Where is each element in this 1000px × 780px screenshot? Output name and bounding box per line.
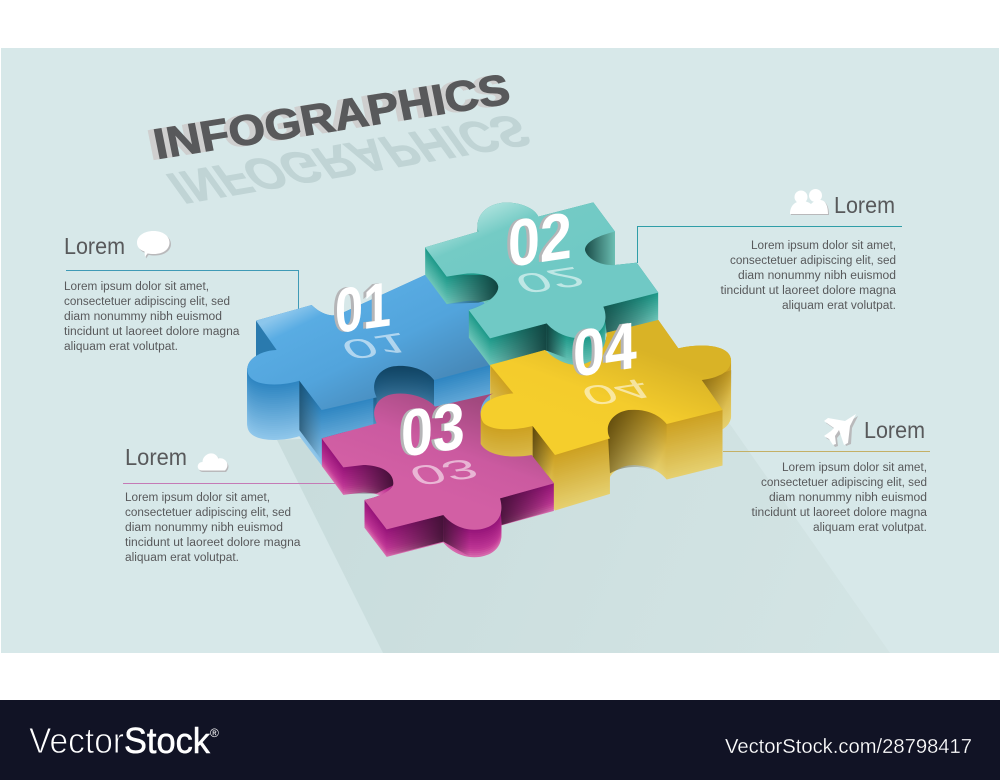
callout 04: bottom right (752, 414, 928, 534)
heading: Lorem (834, 192, 895, 218)
icon: people (790, 189, 829, 215)
footer logo: ® (210, 726, 219, 740)
piece 02: teal (425, 202, 658, 366)
footer logo: Vector (29, 720, 124, 761)
number reflections on pieces (334, 261, 658, 491)
body text: tincidunt ut laoreet dolore magna (125, 537, 301, 549)
title reflection: INFOGRAPHICS (156, 105, 542, 212)
body text: tincidunt ut laoreet dolore magna (720, 285, 897, 297)
number 04: 04 (570, 309, 634, 392)
body text: Lorem ipsum dolor sit amet, (751, 240, 896, 252)
number 02: 02 (505, 199, 569, 282)
body text: diam nonummy nibh euismod (64, 311, 222, 323)
title face: INFOGRAPHICS (150, 66, 514, 169)
number 02: 02 (508, 199, 572, 282)
footer logo: Stock (124, 720, 211, 761)
icon: speech bubble (137, 231, 171, 258)
body text: aliquam erat volutpat. (813, 522, 927, 534)
body text: tincidunt ut laoreet dolore magna (752, 507, 928, 519)
heading: Lorem (864, 417, 925, 443)
magenta side walls (322, 432, 554, 558)
callout 03: bottom left (125, 444, 301, 564)
body text: diam nonummy nibh euismod (738, 270, 896, 282)
reflection 02: 02 (508, 261, 592, 299)
number 03: 03 (398, 389, 462, 472)
number 01: 01 (335, 269, 391, 347)
footer bar (0, 700, 1000, 780)
reflection 03: 03 (402, 453, 486, 491)
heading: Lorem (125, 444, 187, 470)
footer logo (29, 720, 219, 761)
title extrusion: INFOGRAPHICS (148, 66, 512, 169)
body text (125, 492, 301, 564)
reflection 01: 01 (334, 327, 418, 365)
number 04: 04 (573, 309, 637, 392)
body text: consectetuer adipiscing elit, sed (125, 507, 291, 519)
puzzle pieces (247, 202, 732, 557)
heading: Lorem (64, 233, 125, 259)
body text (64, 281, 240, 353)
long cast shadow of puzzle (277, 420, 890, 653)
piece 01: blue (247, 275, 490, 465)
body text: consectetuer adipiscing elit, sed (730, 255, 896, 267)
title: INFOGRAPHICS (144, 66, 542, 212)
body text: consectetuer adipiscing elit, sed (64, 296, 230, 308)
body text: Lorem ipsum dolor sit amet, (125, 492, 270, 504)
body text: diam nonummy nibh euismod (125, 522, 283, 534)
title extrusion: INFOGRAPHICS (146, 66, 510, 169)
title extrusion: INFOGRAPHICS (144, 67, 508, 170)
icon: airplane (824, 414, 858, 447)
footer image id: VectorStock.com/28798417 (725, 736, 972, 758)
body text (720, 240, 897, 312)
piece 04: yellow side walls (481, 320, 732, 510)
body text: aliquam erat volutpat. (125, 552, 239, 564)
body text: aliquam erat volutpat. (782, 300, 896, 312)
callout connector lines (66, 226, 930, 484)
callout 02: top right (720, 189, 897, 312)
body text: aliquam erat volutpat. (64, 341, 178, 353)
background panel (1, 48, 999, 653)
body text: diam nonummy nibh euismod (769, 492, 927, 504)
piece 03: magenta (322, 393, 554, 557)
body text: tincidunt ut laoreet dolore magna (64, 326, 240, 338)
number 01: 01 (332, 269, 388, 347)
body text: consectetuer adipiscing elit, sed (761, 477, 927, 489)
body text (752, 462, 928, 534)
piece 04: yellow top face (481, 320, 731, 455)
magenta top face (322, 393, 554, 530)
icon: cloud (198, 453, 228, 472)
callout 01: left (64, 231, 240, 353)
number 03: 03 (401, 389, 465, 472)
body text: Lorem ipsum dolor sit amet, (64, 281, 209, 293)
body text: Lorem ipsum dolor sit amet, (782, 462, 927, 474)
reflection 04: 04 (574, 373, 658, 411)
